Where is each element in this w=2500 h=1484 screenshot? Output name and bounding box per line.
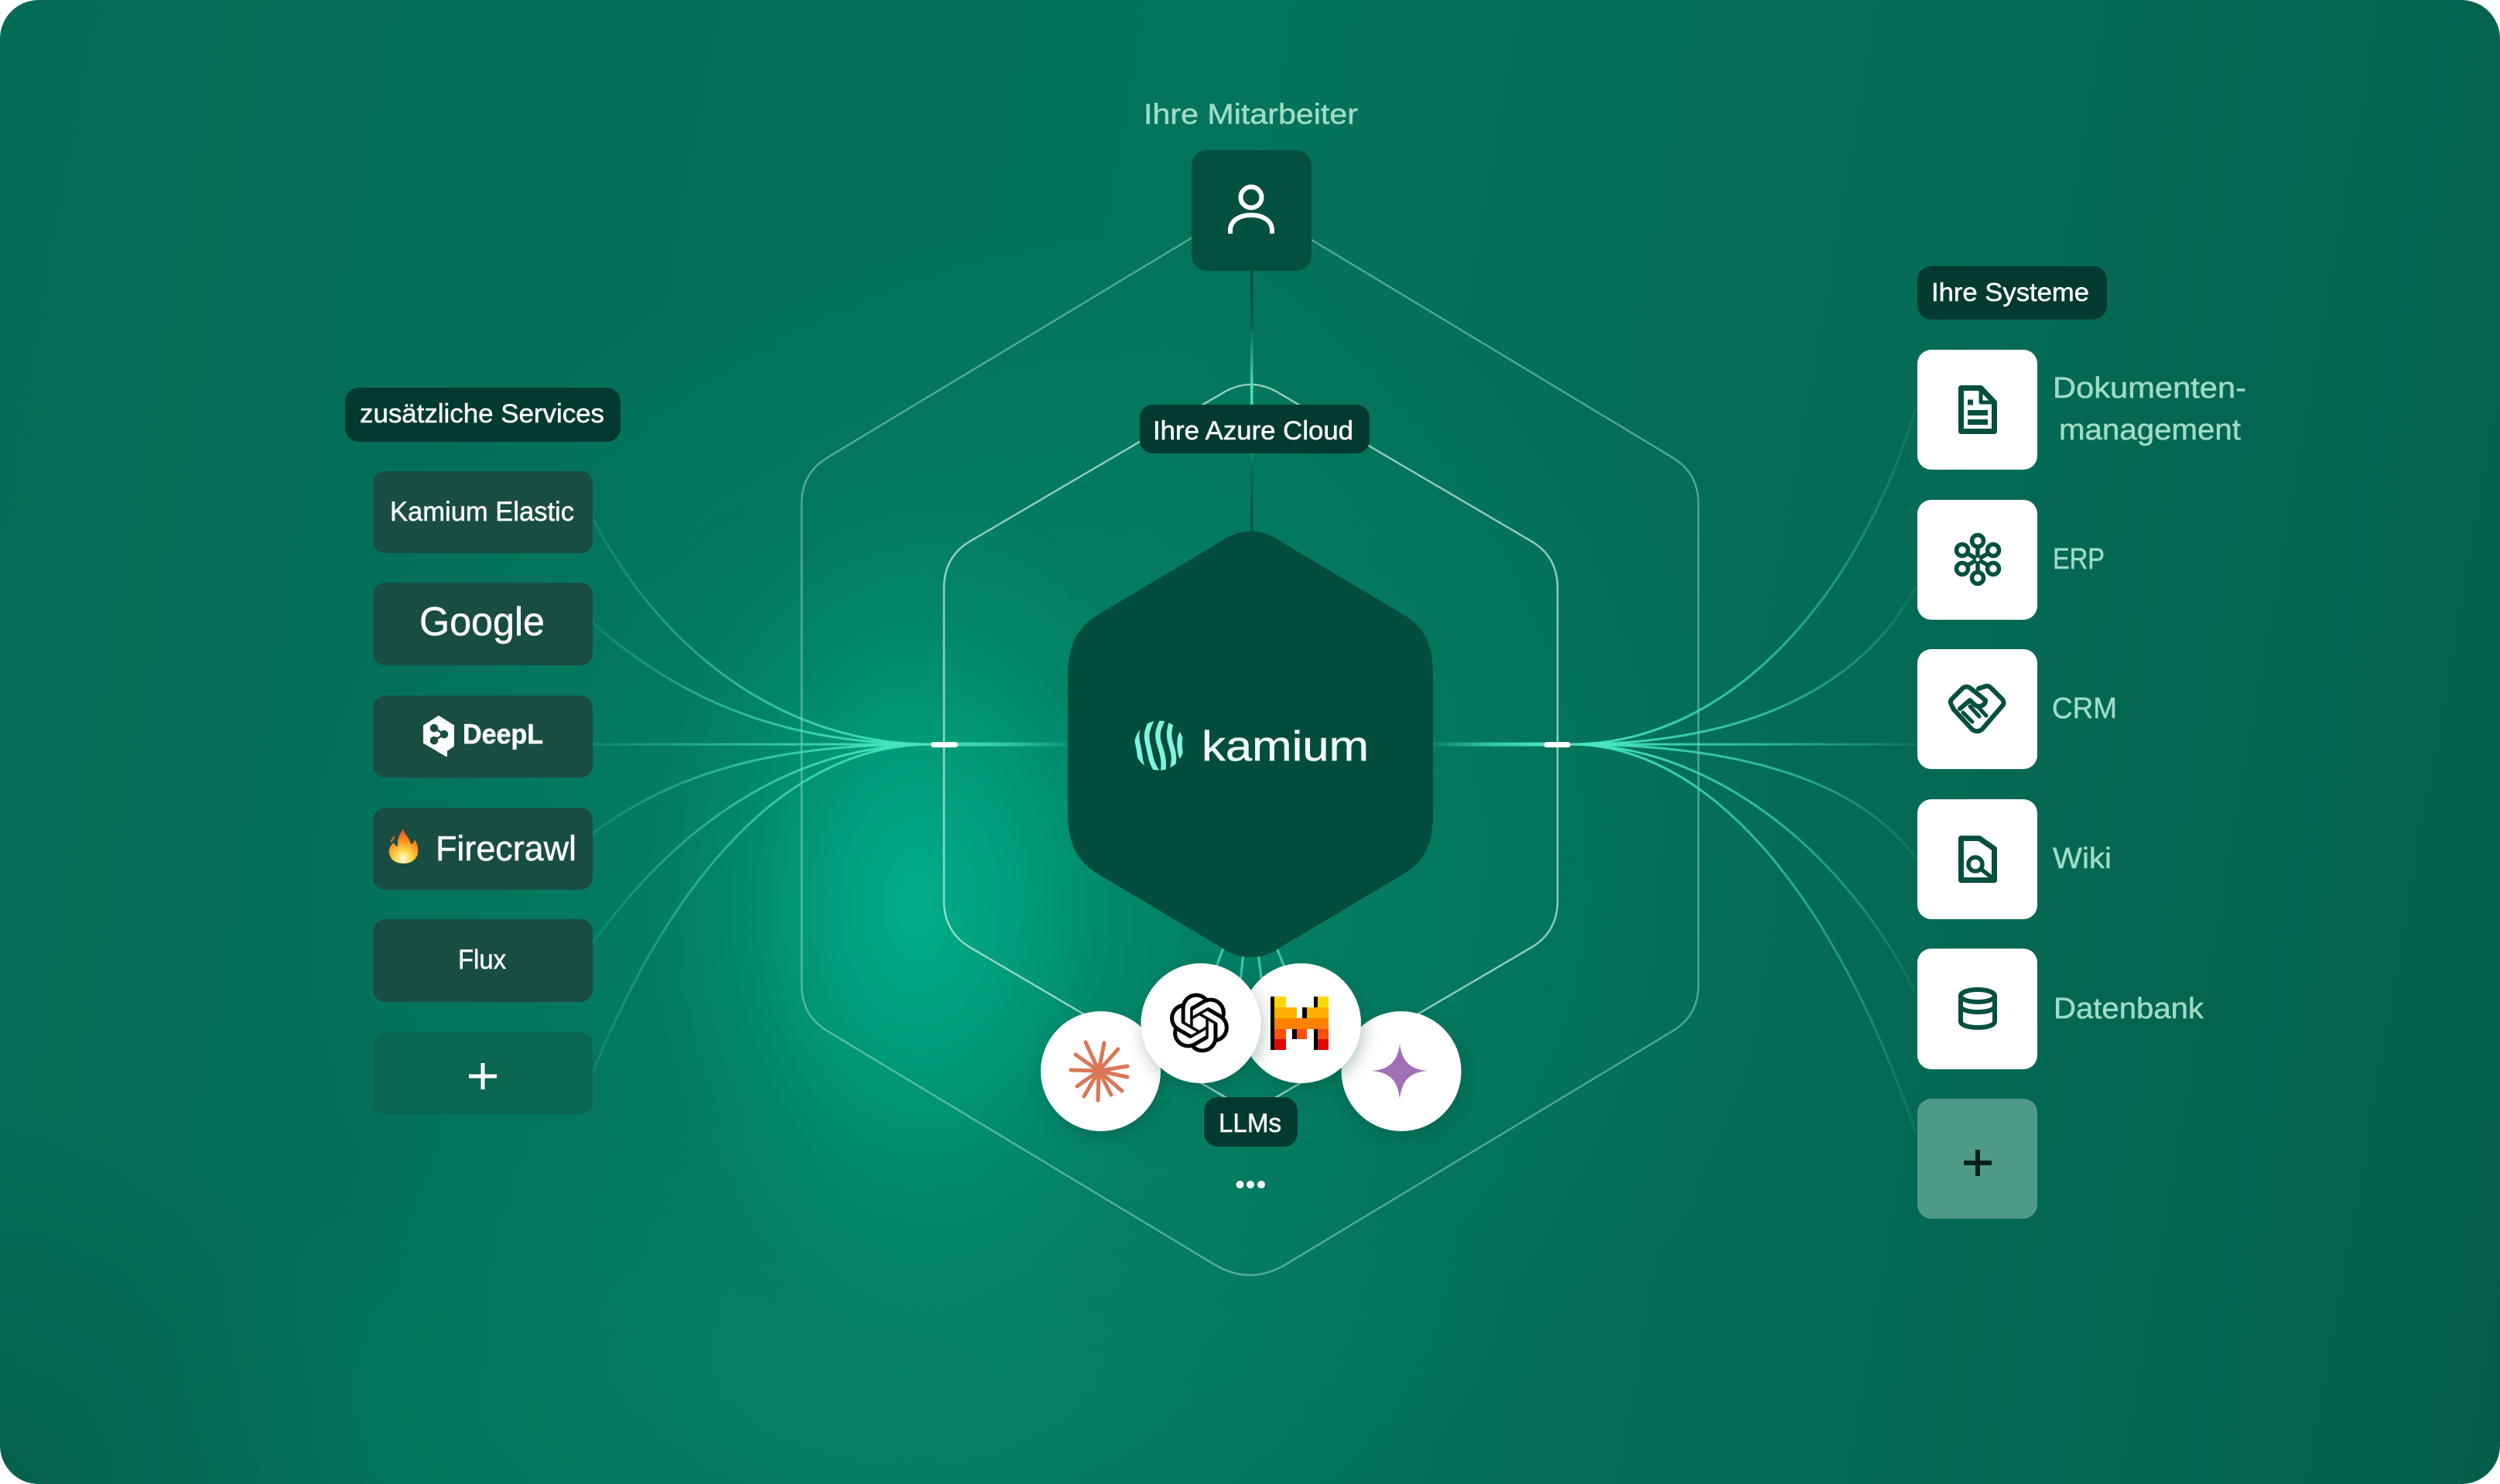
- label: zusätzliche Services: zusätzliche Services: [360, 399, 604, 429]
- system: ERP: ERP: [2053, 543, 2105, 576]
- label: Ihre Systeme: [1917, 266, 2107, 320]
- connectors: core to LLMs: [1215, 948, 1286, 983]
- service: Firecrawl: Firecrawl: [436, 829, 576, 868]
- icon: document: [1961, 388, 1995, 432]
- icon: flame: [389, 829, 418, 863]
- service: Firecrawl: [373, 808, 593, 890]
- panel: your systems: [1917, 266, 2246, 1219]
- LLM circle: OpenAI: [1141, 963, 1261, 1083]
- connector: core to right hub: [1433, 743, 1544, 746]
- system: Dokumentenmanagement: Dokumenten-: [2053, 372, 2246, 405]
- system: Dokumentenmanagement: [1917, 350, 2246, 470]
- kamium wordmark: kamium: [1202, 722, 1369, 770]
- LLM circle: Gemini: [1342, 1011, 1461, 1131]
- system: Dokumentenmanagement: management: [2059, 414, 2241, 446]
- ellipsis: more LLMs: [1236, 1181, 1265, 1188]
- service: Kamium Elastic: [373, 471, 593, 553]
- service: DeepL: DeepL: [463, 718, 543, 750]
- panel: additional services: [345, 388, 621, 1114]
- heading: Ihre Mitarbeiter: Ihre Mitarbeiter: [1144, 98, 1358, 130]
- system: CRM: CRM: [2052, 692, 2117, 725]
- system: add more: [1917, 1099, 2037, 1219]
- label: LLMs: LLMs: [1219, 1109, 1281, 1138]
- LLM circle: Mistral: [1241, 963, 1361, 1083]
- label: Ihre Systeme: Ihre Systeme: [1931, 278, 2089, 306]
- middle hexagon outline (Azure Cloud): [944, 385, 1558, 1104]
- service: add more: [373, 1032, 593, 1114]
- outer hexagon outline: [802, 203, 1698, 1275]
- icon: person: [1230, 187, 1272, 234]
- label: Ihre Azure Cloud: Ihre Azure Cloud: [1153, 416, 1353, 446]
- system: Wiki: Wiki: [2053, 843, 2112, 875]
- service: Google: [373, 583, 593, 665]
- left hub marker: [931, 742, 958, 747]
- service: Flux: Flux: [458, 945, 506, 975]
- service: DeepL: [373, 696, 593, 778]
- connectors: your systems: [1571, 406, 1917, 1133]
- central kamium hexagon: [1068, 532, 1433, 957]
- system: Datenbank: [1917, 949, 2204, 1069]
- label: zusätzliche Services: [345, 388, 621, 442]
- icon: network: [1956, 535, 1999, 583]
- label: Ihre Azure Cloud: [1140, 405, 1370, 453]
- connector: employees to core: [1250, 271, 1253, 532]
- connectors: additional services: [593, 518, 931, 1072]
- system: Datenbank: Datenbank: [2054, 993, 2204, 1025]
- LLM circle: Claude: [1041, 1011, 1161, 1131]
- service: Google: Google: [419, 600, 545, 645]
- system: CRM: [1917, 649, 2117, 769]
- label: LLMs: [1204, 1097, 1298, 1147]
- icon: DeepL: [424, 716, 453, 756]
- connector: core to left hub: [931, 743, 1069, 746]
- service: Flux: [373, 919, 593, 1002]
- icon: document search: [1961, 839, 1995, 880]
- icon: handshake: [1951, 686, 2004, 731]
- system: ERP: [1917, 500, 2105, 620]
- kamium logo mark: [1137, 720, 1183, 772]
- system: Wiki: [1917, 799, 2112, 919]
- right hub marker: [1544, 742, 1571, 747]
- service: Kamium Elastic: Kamium Elastic: [390, 497, 574, 527]
- icon: database: [1961, 990, 1995, 1028]
- employee box: [1192, 150, 1312, 271]
